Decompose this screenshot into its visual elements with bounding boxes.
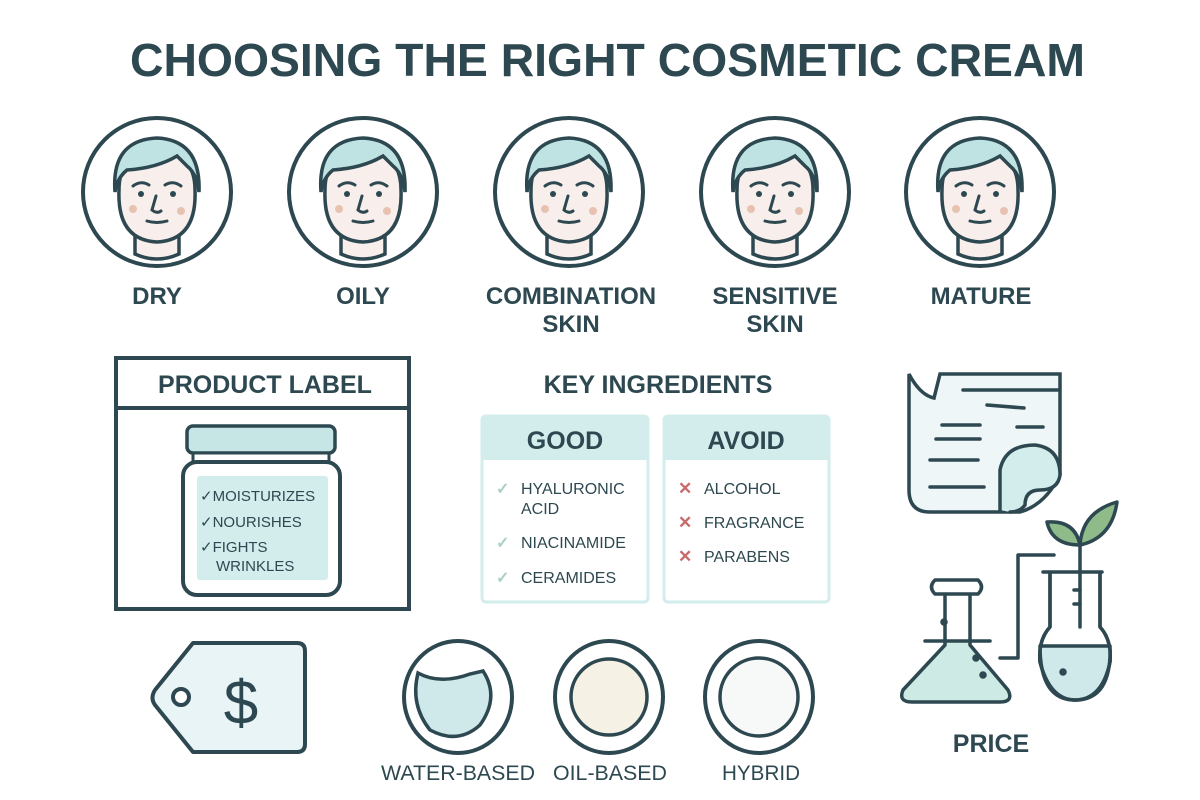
skin type: dry: DRY [132, 283, 182, 310]
icon: lab flasks with plant [895, 502, 1117, 706]
skin type: oily: OILY [336, 283, 390, 310]
icon: cream jar [183, 426, 340, 595]
texture: water-based: WATER-BASED [381, 762, 535, 785]
table: good: ACID [521, 501, 559, 518]
table: good: ✓ [496, 535, 509, 552]
texture: hybrid: HYBRID [722, 762, 800, 785]
skin type: oily [289, 118, 437, 310]
icon: cream jar: ✓FIGHTS [200, 539, 268, 556]
table: avoid: ✕ [678, 479, 692, 498]
skin types row [83, 118, 1054, 338]
icon: document [909, 374, 1060, 512]
table: avoid: FRAGRANCE [704, 515, 804, 532]
skin type: sensitive [701, 118, 849, 338]
texture: water-based [381, 641, 535, 785]
icon: cream jar: ✓NOURISHES [200, 514, 302, 531]
table: good: ✓ [496, 481, 509, 498]
heading: key ingredients: KEY INGREDIENTS [544, 371, 772, 399]
table: good [482, 416, 648, 602]
skin type: combination: SKIN [542, 311, 600, 338]
skin type: combination [486, 118, 656, 338]
table: avoid [664, 416, 829, 602]
icon: price tag: $ [224, 669, 258, 738]
icon: price tag [152, 643, 305, 752]
texture: oil-based: OIL-BASED [553, 762, 667, 785]
table: avoid: ALCOHOL [704, 481, 781, 498]
table: avoid: ✕ [678, 513, 692, 532]
skin type: sensitive: SKIN [746, 311, 804, 338]
cream textures [381, 641, 813, 785]
skin type: sensitive: SENSITIVE [712, 283, 838, 310]
table: avoid: AVOID [707, 427, 785, 455]
skin type: dry [83, 118, 231, 310]
table: good: NIACINAMIDE [521, 535, 626, 552]
heading: product label: PRODUCT LABEL [158, 371, 372, 399]
panel: product label [116, 358, 409, 609]
table: avoid: PARABENS [704, 549, 790, 566]
label: price: PRICE [953, 730, 1029, 758]
skin type: mature: MATURE [931, 283, 1031, 310]
icon: cream jar: WRINKLES [216, 558, 294, 575]
skin type: combination: COMBINATION [486, 283, 656, 310]
table: avoid: ✕ [678, 547, 692, 566]
table: good: GOOD [527, 427, 603, 455]
skin type: mature [906, 118, 1054, 310]
texture: oil-based [553, 641, 667, 785]
title: CHOOSING THE RIGHT COSMETIC CREAM [130, 34, 1085, 86]
table: good: ✓ [496, 570, 509, 587]
panel: key ingredients [482, 371, 829, 602]
icon: cream jar: ✓MOISTURIZES [200, 488, 315, 505]
table: good: CERAMIDES [521, 570, 616, 587]
texture: hybrid [705, 641, 813, 785]
table: good: HYALURONIC [521, 481, 625, 498]
